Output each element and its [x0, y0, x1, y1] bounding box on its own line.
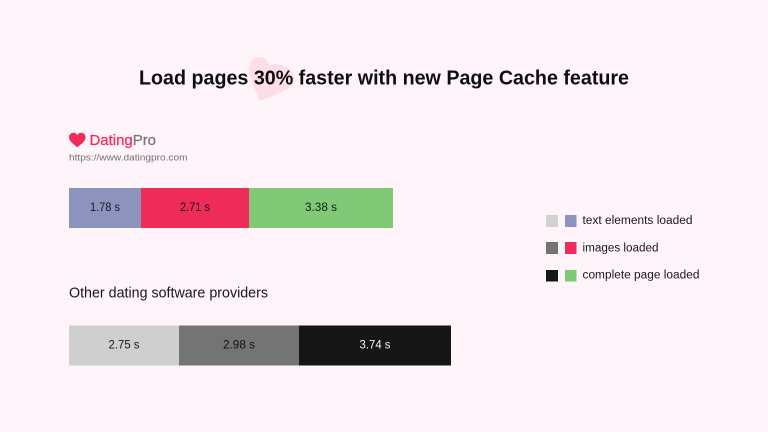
legend row: complete page loaded: complete page loaded — [582, 270, 700, 282]
heading: other providers: Other dating software providers — [69, 286, 268, 302]
segment: images 2.71 s: 2.71 s — [180, 202, 210, 214]
segment: images 2.98 s — [179, 326, 299, 366]
bar chart: other providers load times — [69, 326, 451, 366]
legend row: images loaded: images loaded — [582, 242, 658, 254]
legend row: images loaded — [546, 242, 658, 254]
website url: https://www.datingpro.com — [69, 152, 188, 164]
segment: complete page 3.38 s — [249, 188, 393, 228]
title: Load pages 30% faster with new Page Cache feature — [139, 66, 629, 90]
segment: complete page 3.38 s: 3.38 s — [305, 202, 337, 214]
segment: text elements 2.75 s — [69, 326, 179, 366]
legend — [546, 215, 700, 282]
bar chart: DatingPro load times — [69, 188, 393, 228]
segment: text elements 2.75 s: 2.75 s — [108, 340, 140, 352]
icon: logo heart — [69, 133, 86, 147]
segment: text elements 1.78 s: 1.78 s — [90, 202, 120, 214]
segment: complete page 3.74 s: 3.74 s — [360, 340, 391, 352]
segment: text elements 1.78 s — [69, 188, 141, 228]
logo wordmark: DatingPro — [90, 132, 156, 149]
segment: complete page 3.74 s — [299, 326, 451, 366]
icon: decorative title heart — [249, 57, 294, 101]
segment: images 2.71 s — [141, 188, 249, 228]
legend row: text elements loaded: text elements loaded — [582, 215, 692, 227]
logo: DatingPro — [69, 132, 156, 149]
segment: images 2.98 s: 2.98 s — [223, 340, 255, 352]
